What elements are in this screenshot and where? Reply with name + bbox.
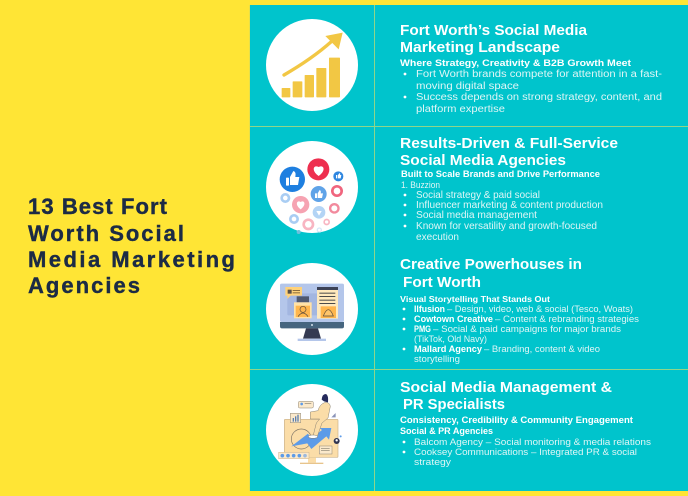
heading: full-service agencies: Results-Driven & Full-Service (400, 136, 618, 152)
text block: full-service agencies (400, 136, 618, 243)
agency name: Buzzion: 1. Buzzion (401, 179, 440, 190)
heading: creative powerhouses: Fort Worth (403, 275, 481, 291)
bullets: creative agencies: storytelling (414, 354, 460, 364)
bullets: creative agencies: – Social & paid campaigns for major brands (433, 324, 622, 334)
bullets: creative agencies: – Branding, content & video (484, 344, 600, 354)
bullets: PR agencies (403, 436, 651, 467)
bullets: creative agencies: Mallard Agency (414, 344, 482, 354)
bullets: landscape: moving digital space (416, 81, 519, 92)
icon: social reactions (266, 141, 358, 234)
bullets: landscape: platform expertise (416, 104, 505, 115)
subheading: full-service agencies: Built to Scale Brands and Drive Performance (401, 169, 600, 179)
heading: landscape: Fort Worth’s Social Media (400, 23, 588, 39)
subheading: management and PR: Social & PR Agencies (400, 426, 493, 436)
bullets: Buzzion: Known for versatility and growth-focused (416, 221, 597, 232)
subheading: management and PR: Consistency, Credibility & Community Engagement (400, 415, 633, 425)
main title: Agencies (28, 273, 140, 298)
subheading: creative powerhouses: Visual Storytelling That Stands Out (400, 294, 550, 304)
heading: management and PR: Social Media Management & (400, 380, 612, 396)
bullets: creative agencies: PMG (414, 324, 431, 334)
icon: desktop monitor (266, 263, 358, 355)
main title (28, 194, 235, 298)
text block: landscape (400, 23, 662, 115)
subheading: landscape: Where Strategy, Creativity & B2B Growth Meet (400, 58, 631, 68)
subheading: management and PR (400, 415, 633, 436)
bullets: creative agencies: Ilfusion (414, 304, 445, 314)
bullets: PR agencies: strategy (414, 456, 451, 467)
bullets: PR agencies: Cooksey Communications – Integrated PR & social (414, 446, 637, 457)
bullets: landscape (404, 69, 662, 115)
bullets: creative agencies: – Design, video, web & social (Tesco, Woats) (447, 304, 633, 314)
text block: management and PR (400, 380, 651, 467)
bullets: creative agencies (403, 304, 640, 364)
main title: Media Marketing (28, 247, 235, 272)
bullets: creative agencies: – Content & rebranding strategies (495, 314, 640, 324)
heading: management and PR (400, 380, 612, 413)
text block: creative powerhouses (400, 257, 640, 364)
heading: full-service agencies (400, 136, 618, 169)
bullets: Buzzion: Social media management (416, 210, 537, 221)
main title: 13 Best Fort (28, 194, 168, 219)
bullets: creative agencies: (TikTok, Old Navy) (414, 334, 487, 344)
bullets: PR agencies: Balcom Agency – Social monitoring & media relations (414, 436, 651, 447)
main title: Worth Social (28, 221, 184, 246)
heading: full-service agencies: Social Media Agencies (400, 153, 566, 169)
icon: analytics illustration (266, 384, 358, 476)
heading: landscape (400, 23, 588, 56)
icon: growth chart (266, 19, 358, 111)
bullets: landscape: Success depends on strong strategy, content, and (416, 92, 662, 103)
heading: management and PR: PR Specialists (403, 397, 505, 413)
bullets: creative agencies: Cowtown Creative (414, 314, 493, 324)
bullets: Buzzion: Influencer marketing & content production (416, 200, 603, 211)
heading: creative powerhouses: Creative Powerhouses in (400, 257, 582, 273)
bullets: Buzzion: execution (416, 232, 459, 243)
bullets: Buzzion: Social strategy & paid social (416, 190, 540, 201)
bullets: Buzzion (404, 190, 603, 243)
heading: landscape: Marketing Landscape (400, 40, 560, 56)
bullets: landscape: Fort Worth brands compete for attention in a fast- (416, 69, 662, 80)
teal panel (250, 5, 688, 491)
heading: creative powerhouses (400, 257, 582, 291)
